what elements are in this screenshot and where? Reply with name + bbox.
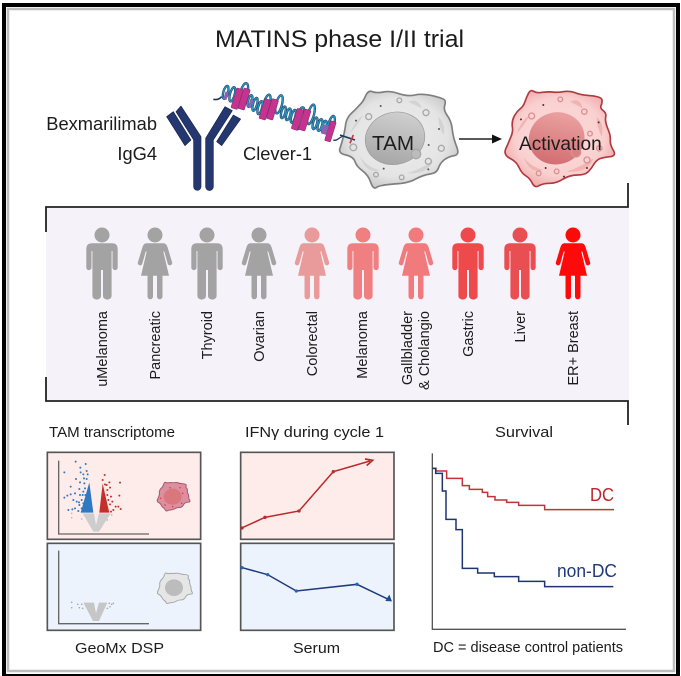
chart: volcano plot non-activated <box>47 543 201 630</box>
person: uMelanoma <box>86 228 118 387</box>
label: Clever-1: Clever-1 <box>243 143 312 164</box>
panel: tumour types <box>46 183 629 425</box>
title: MATINS phase I/II trial <box>215 26 464 53</box>
icon: activated cell <box>505 91 614 187</box>
icon: Clever-1 protein <box>213 82 355 142</box>
heading: IFN gamma during cycle 1: IFNγ during cycle 1 <box>245 424 384 441</box>
person: Ovarian <box>242 228 276 362</box>
person: Colorectal <box>295 228 329 376</box>
label: TAM: TAM <box>372 133 414 155</box>
chart: survival curves <box>432 453 626 629</box>
person: Gastric: Gastric <box>461 311 477 357</box>
heading: TAM transcriptome: TAM transcriptome <box>49 424 175 441</box>
label: GeoMx DSP: GeoMx DSP <box>75 640 164 657</box>
chart: volcano plot activated <box>47 452 201 539</box>
chart: IFN gamma falling line <box>240 543 394 630</box>
label: Bexmarilimab IgG4 <box>46 113 157 164</box>
label: Bexmarilimab IgG4: IgG4 <box>117 143 157 164</box>
label: Bexmarilimab IgG4: Bexmarilimab <box>46 113 157 134</box>
person: Gallbladder and Cholangio: Gallbladder <box>400 311 416 385</box>
person: Melanoma: Melanoma <box>355 310 371 379</box>
label: Serum: Serum <box>293 640 340 657</box>
person: uMelanoma: uMelanoma <box>95 310 111 387</box>
person: Pancreatic: Pancreatic <box>148 311 164 380</box>
chart: IFN gamma rising line <box>240 452 394 539</box>
label: non-DC: non-DC <box>557 561 617 581</box>
person: ER+ Breast: ER+ Breast <box>566 311 582 386</box>
icon: antibody <box>167 106 241 190</box>
heading: Survival: Survival <box>495 424 553 441</box>
person: Gallbladder and Cholangio <box>399 228 433 390</box>
person: Thyroid <box>191 228 223 359</box>
person: Colorectal: Colorectal <box>305 311 321 376</box>
person: ER+ Breast <box>556 228 590 386</box>
label: Activation: Activation <box>519 134 602 155</box>
person: Pancreatic <box>138 228 172 380</box>
person: Ovarian: Ovarian <box>252 311 268 362</box>
person: Gallbladder and Cholangio: & Cholangio <box>417 311 433 390</box>
person: Liver <box>504 228 536 342</box>
label: DC: DC <box>590 485 614 505</box>
person: Gastric <box>452 228 484 357</box>
icon: TAM cell <box>340 91 458 188</box>
arrow: TAM to activation <box>459 134 502 144</box>
person: Thyroid: Thyroid <box>200 311 216 359</box>
note: DC definition: DC = disease control patients <box>433 640 623 656</box>
person: Melanoma <box>347 228 379 379</box>
person: Liver: Liver <box>513 311 529 342</box>
